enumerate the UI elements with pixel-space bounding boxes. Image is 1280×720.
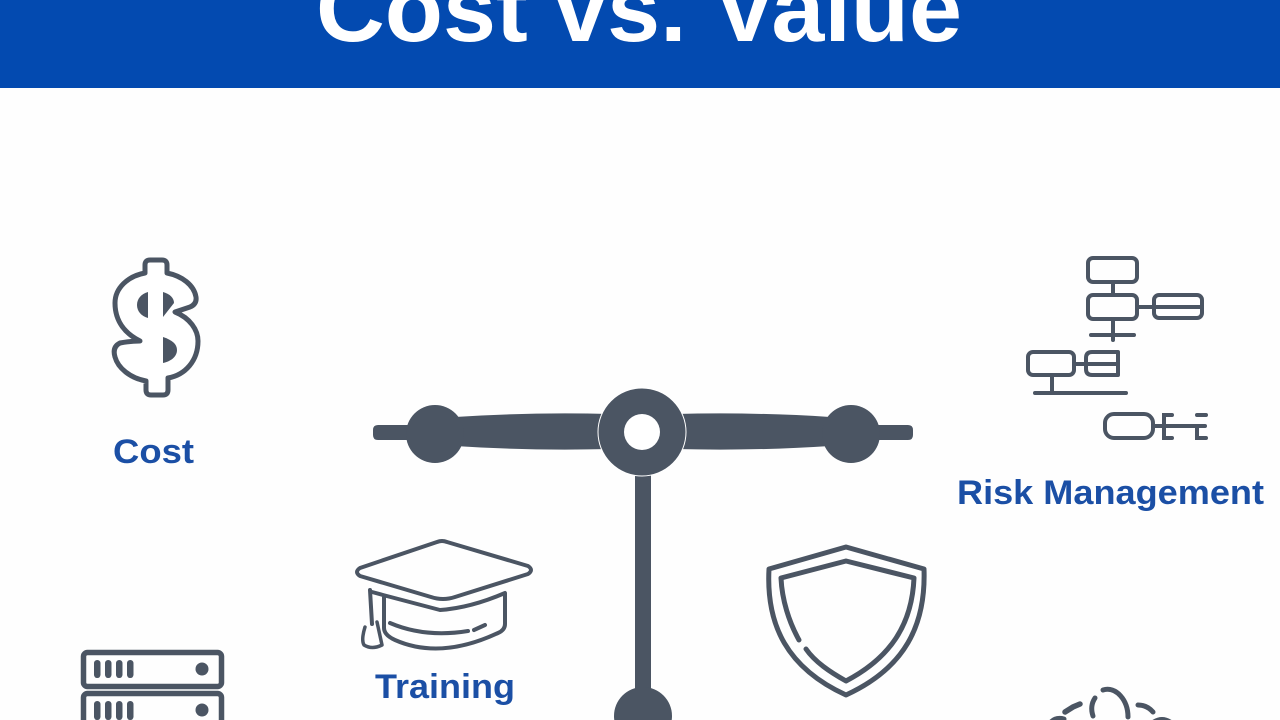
hub [598, 388, 686, 476]
stem [635, 475, 651, 695]
icon: shield [769, 547, 924, 695]
label: Cost: Cost [113, 433, 194, 471]
icon: dollar sign [114, 260, 198, 395]
label: Risk Management: Risk Management [957, 474, 1264, 512]
icon: graduation cap [357, 541, 531, 649]
base knob [614, 687, 672, 720]
header banner [0, 0, 1280, 88]
beam [373, 425, 913, 440]
label: Training: Training [375, 668, 515, 706]
icon: balance scale [373, 388, 913, 720]
icon: cloud network (cropped) [1051, 689, 1170, 720]
icon: risk management network [1028, 258, 1206, 438]
icon: server rack [84, 652, 222, 720]
